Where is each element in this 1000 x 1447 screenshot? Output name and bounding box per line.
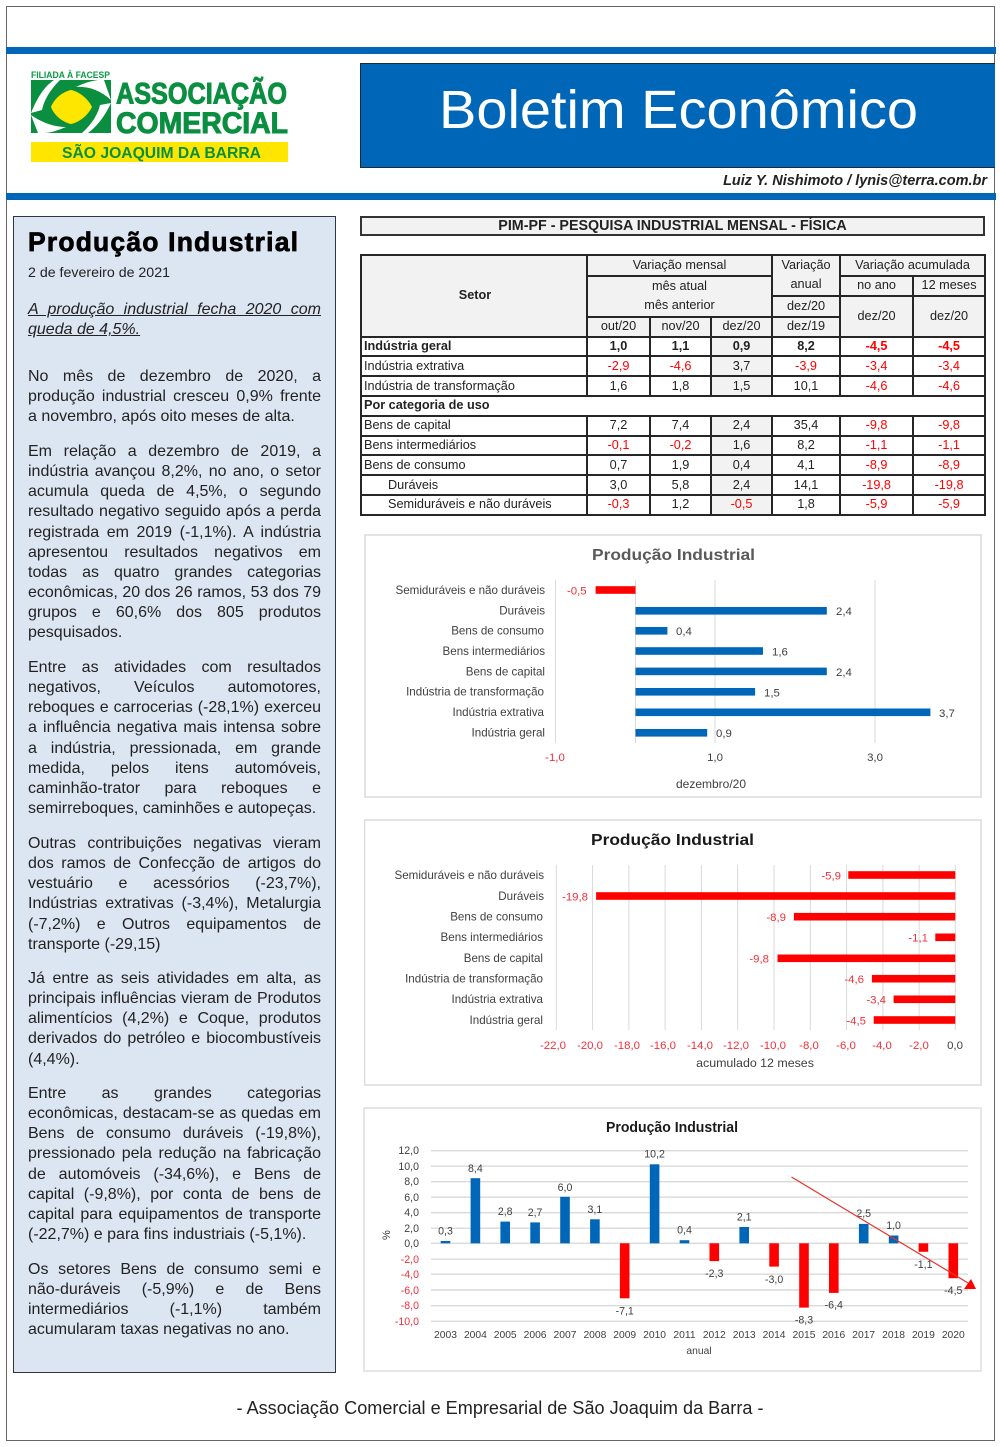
year labels: 2016 xyxy=(822,1330,846,1341)
paragraph 2: Em relação a dezembro de 2019, a xyxy=(28,443,321,460)
year labels: 2005 xyxy=(494,1330,517,1341)
category labels xyxy=(395,584,545,740)
author credit: Luiz Y. Nishimoto / lynis@terra.com.br xyxy=(723,173,987,189)
value labels: 2,7 xyxy=(528,1207,543,1219)
category labels: Bens intermediários xyxy=(443,645,545,658)
logo: Associação Comercial: SÃO JOAQUIM DA BARRA xyxy=(62,144,261,162)
value labels: 0,4 xyxy=(676,626,692,638)
axis labels xyxy=(545,752,883,791)
data table: -0,1 xyxy=(608,438,629,452)
paragraph 7: não-duráveis (-5,9%) e de Bens xyxy=(28,1281,321,1298)
category labels: Indústria geral xyxy=(470,1014,543,1027)
axis labels: 3,0 xyxy=(867,752,883,764)
value labels xyxy=(567,586,955,740)
paragraph 7: Os setores Bens de consumo semi e xyxy=(28,1261,321,1278)
data table: -0,2 xyxy=(670,438,691,452)
axis labels: -18,0 xyxy=(614,1040,640,1052)
data table: 2,4 xyxy=(733,478,750,492)
data table: 1,1 xyxy=(672,339,689,353)
logo: Associação Comercial: FILIADA À FACESP xyxy=(31,70,110,80)
data table: 1,9 xyxy=(672,458,689,472)
year labels: 2004 xyxy=(464,1330,487,1341)
paragraph 1: a novembro, após oito meses de alta. xyxy=(28,408,295,425)
axis labels: -6,0 xyxy=(836,1040,856,1052)
chart title: Produção Industrial xyxy=(591,832,754,849)
data table: dez/20 xyxy=(857,309,896,323)
data table: -1,1 xyxy=(938,438,960,452)
paragraph 7: intermediários (-1,1%) também xyxy=(28,1301,321,1318)
data table: 3,7 xyxy=(733,359,750,373)
article lead: A produção industrial fecha 2020 com xyxy=(28,301,321,318)
category labels: Indústria de transformação xyxy=(406,686,544,698)
category labels xyxy=(394,869,544,1027)
data table: -0,5 xyxy=(731,497,752,511)
y axis labels: -4,0 xyxy=(401,1269,419,1281)
data table: Duráveis xyxy=(388,478,438,492)
chart: anual column chart xyxy=(363,1107,982,1372)
data table: 1,0 xyxy=(610,339,627,353)
paragraph 4: dos ramos de Confecção de artigos do xyxy=(28,855,321,872)
category labels: Bens de consumo xyxy=(450,910,543,924)
year labels: 2020 xyxy=(942,1330,965,1341)
category labels: Indústria geral xyxy=(472,726,545,740)
paragraph 2 xyxy=(28,443,322,641)
data table: -19,8 xyxy=(935,478,964,492)
value labels: 0,3 xyxy=(438,1226,453,1238)
data table: Variação mensal xyxy=(633,258,726,272)
chart: acumulado 12 meses horizontal bars xyxy=(364,819,982,1086)
paragraph 6: capital (-9,8%), por conta de bens de xyxy=(28,1186,321,1203)
category labels: Semiduráveis e não duráveis xyxy=(395,584,545,597)
data table: mês anterior xyxy=(644,298,715,312)
paragraph 6: pressionado pela redução na fabricação xyxy=(28,1145,321,1162)
paragraph 4: Indústrias extrativas (-3,4%), Metalurgia xyxy=(28,895,321,912)
data table: -9,8 xyxy=(938,418,960,432)
paragraph 3: Entre as atividades com resultados xyxy=(28,659,321,676)
banner title text: Boletim Econômico xyxy=(439,80,918,140)
axis labels: -12,0 xyxy=(723,1040,749,1052)
paragraph 2: registrada em 2019 (-1,1%). A indústria xyxy=(28,524,321,541)
paragraph 5: alimentícios (4,2%) e Coque, produtos xyxy=(28,1010,321,1027)
data table: 1,6 xyxy=(610,379,627,393)
panel background xyxy=(13,216,336,1373)
data table: 0,7 xyxy=(610,458,627,472)
value labels: -3,0 xyxy=(765,1274,783,1286)
axis labels: -16,0 xyxy=(650,1040,676,1052)
paragraph 6: capital para equipamentos de transporte xyxy=(28,1206,321,1223)
axis labels xyxy=(540,1040,963,1052)
y axis labels: 6,0 xyxy=(404,1192,419,1204)
paragraph 4: vestuário e acessórios (-23,7%), xyxy=(28,875,321,892)
year labels: 2012 xyxy=(703,1330,726,1341)
paragraph 6: Entre as grandes categorias xyxy=(28,1085,321,1102)
data table: -3,4 xyxy=(866,359,887,373)
value labels: -4,5 xyxy=(846,1016,866,1028)
value labels: 2,1 xyxy=(737,1212,752,1224)
data table: -3,9 xyxy=(795,359,817,373)
data table: Bens de capital xyxy=(364,418,451,432)
paragraph 6: (-22,7%) e para fins industriais (-5,1%). xyxy=(28,1226,306,1243)
data table: Setor xyxy=(459,288,491,302)
paragraph 3: caminhão-trator para reboques e xyxy=(28,780,321,797)
value labels: -4,6 xyxy=(844,974,864,986)
y axis labels: -10,0 xyxy=(395,1316,419,1328)
paragraph 6: Bens de consumo duráveis (-19,8%), xyxy=(28,1125,321,1142)
data table: -5,9 xyxy=(866,497,887,511)
data table: 4,1 xyxy=(797,458,815,472)
paragraph 3: negativos, Veículos automotores, xyxy=(28,679,321,696)
y axis labels: 4,0 xyxy=(404,1207,419,1219)
value labels: 3,1 xyxy=(588,1204,602,1216)
value labels: -5,9 xyxy=(821,870,841,882)
value labels: -7,1 xyxy=(616,1306,634,1318)
data table: mês atual xyxy=(652,279,707,293)
title banner xyxy=(360,63,995,168)
paragraph 2: pesquisados. xyxy=(28,624,122,641)
axis labels: dezembro/20 xyxy=(676,777,746,791)
axis labels: -1,0 xyxy=(545,752,565,764)
arrow: downward trend xyxy=(792,1177,976,1289)
data table: -2,9 xyxy=(608,359,629,373)
data table: 10,1 xyxy=(794,379,818,393)
paragraph 3: a influência negativa mais intensa sobre xyxy=(28,719,321,736)
data table: Indústria de transformação xyxy=(364,379,515,393)
data table: 1,6 xyxy=(733,438,750,452)
data table: 1,5 xyxy=(733,379,750,393)
data table xyxy=(360,254,986,516)
paragraph 3: medida, pelos itens automóveis, xyxy=(28,760,321,777)
data table: -4,5 xyxy=(866,339,887,353)
logo: Associação Comercial xyxy=(31,70,288,162)
value labels: 2,8 xyxy=(498,1206,513,1218)
year labels: 2011 xyxy=(673,1330,696,1341)
year labels: 2019 xyxy=(912,1330,935,1341)
value labels: 1,6 xyxy=(772,646,788,658)
value labels: -3,4 xyxy=(866,994,886,1006)
y axis labels: -2,0 xyxy=(401,1254,419,1266)
paragraph 7 xyxy=(28,1261,321,1338)
data table: Variação acumulada xyxy=(855,258,970,272)
bars xyxy=(596,586,930,737)
data table: Variação xyxy=(781,258,831,272)
data table: 3,0 xyxy=(610,478,627,492)
data table: 8,2 xyxy=(797,438,815,452)
category labels: Indústria extrativa xyxy=(452,706,545,719)
data table: -3,4 xyxy=(938,359,960,373)
paragraph 7: acumularam taxas negativas no ano. xyxy=(28,1321,289,1338)
data table: 1,2 xyxy=(672,497,689,511)
year labels: 2014 xyxy=(763,1330,786,1341)
paragraph 1 xyxy=(28,368,322,425)
value labels: -1,1 xyxy=(914,1259,933,1271)
paragraph 3: semirreboques, caminhões e autopeças. xyxy=(28,800,316,817)
year labels xyxy=(434,1330,965,1357)
chart title: Produção Industrial xyxy=(592,547,755,564)
data table: Indústria extrativa xyxy=(364,359,464,373)
paragraph 2: acumula queda de 4,5%, o segundo xyxy=(28,483,321,500)
paragraph 5: derivados do petróleo e biocombustíveis xyxy=(28,1030,321,1047)
y axis title: % xyxy=(381,1230,393,1240)
data table: -4,6 xyxy=(670,359,691,373)
chart: dezembro/20 horizontal bars xyxy=(364,534,982,798)
axis labels: 1,0 xyxy=(707,752,723,764)
category labels: Semiduráveis e não duráveis xyxy=(394,869,544,882)
value labels: 1,5 xyxy=(764,688,780,700)
value labels: -6,4 xyxy=(825,1300,843,1312)
value labels: 1,0 xyxy=(886,1220,901,1232)
value labels: -4,5 xyxy=(944,1285,963,1297)
paragraph 2: apresentou resultados negativos em xyxy=(28,544,321,561)
paragraph 2: resultado negativo seguido após a perda xyxy=(28,503,321,520)
paragraph 1: No mês de dezembro de 2020, a xyxy=(28,368,321,385)
article heading: Produção Industrial xyxy=(28,227,298,257)
y axis labels xyxy=(395,1145,419,1328)
data table: 14,1 xyxy=(794,478,818,492)
category labels: Indústria de transformação xyxy=(405,972,543,986)
category labels: Bens intermediários xyxy=(441,931,543,944)
axis labels: 0,0 xyxy=(947,1040,963,1052)
paragraph 3: a indústria, pressionada, em grande xyxy=(28,740,321,757)
bars xyxy=(596,871,955,1024)
data table: Semiduráveis e não duráveis xyxy=(388,497,552,511)
paragraph 1: produção industrial cresceu 0,9% frente xyxy=(28,388,321,405)
y axis labels: -6,0 xyxy=(401,1285,419,1297)
bars xyxy=(441,1164,958,1308)
paragraph 5: Já entre as seis atividades em alta, as xyxy=(28,970,321,987)
value labels: 2,5 xyxy=(856,1208,871,1220)
value labels: 0,4 xyxy=(677,1224,692,1236)
paragraph 5: (4,4%). xyxy=(28,1051,80,1068)
value labels: -2,3 xyxy=(705,1268,724,1280)
article lead: queda de 4,5%. xyxy=(28,321,140,338)
value labels: 0,9 xyxy=(716,728,732,740)
data table: -4,6 xyxy=(938,379,960,393)
y axis labels: 0,0 xyxy=(404,1238,419,1250)
data table: 0,9 xyxy=(733,339,750,353)
footer: - Associação Comercial e Empresarial de São Joaquim da Barra - xyxy=(237,1398,763,1418)
data table: anual xyxy=(790,277,822,291)
data table: out/20 xyxy=(601,319,636,333)
table heading xyxy=(360,216,985,236)
value labels: -9,8 xyxy=(749,954,769,966)
article lead xyxy=(27,301,321,338)
data table: 5,8 xyxy=(672,478,689,492)
data table: dez/19 xyxy=(787,319,825,333)
category labels: Bens de capital xyxy=(466,666,545,678)
data table: 2,4 xyxy=(733,418,750,432)
year labels: 2007 xyxy=(554,1330,577,1341)
y axis labels: -8,0 xyxy=(401,1300,419,1312)
year labels: 2006 xyxy=(524,1330,547,1341)
paragraph 2: indústria avançou 8,2%, no ano, o setor xyxy=(28,463,321,480)
table heading: PIM-PF - PESQUISA INDUSTRIAL MENSAL - FÍSICA xyxy=(498,218,847,234)
data table: dez/20 xyxy=(930,309,968,323)
data table: -4,6 xyxy=(866,379,887,393)
logo: Associação Comercial: COMERCIAL xyxy=(116,107,288,140)
axis labels: -22,0 xyxy=(540,1040,566,1052)
data table: Por categoria de uso xyxy=(364,398,490,412)
category labels: Bens de consumo xyxy=(451,624,544,638)
year labels: 2017 xyxy=(852,1330,875,1341)
year labels: 2018 xyxy=(882,1330,905,1341)
paragraph 4: Outras contribuições negativas vieram xyxy=(28,835,321,852)
data table: Bens de consumo xyxy=(364,458,466,472)
value labels: 10,2 xyxy=(644,1148,665,1160)
paragraph 6: econômicas, destacam-se as quedas em xyxy=(28,1105,321,1122)
category labels: Duráveis xyxy=(499,604,545,618)
axis labels: -20,0 xyxy=(577,1040,603,1052)
axis labels: -2,0 xyxy=(909,1040,929,1052)
value labels xyxy=(438,1148,963,1326)
data table: -9,8 xyxy=(866,418,887,432)
y axis labels: 2,0 xyxy=(404,1223,419,1235)
data table: 8,2 xyxy=(797,339,815,353)
y axis labels: 10,0 xyxy=(398,1161,419,1173)
data table: -8,9 xyxy=(938,458,960,472)
axis labels: -14,0 xyxy=(687,1040,713,1052)
data table: 1,8 xyxy=(797,497,815,511)
category labels: Duráveis xyxy=(498,890,544,903)
value labels: 8,4 xyxy=(468,1163,483,1175)
data table: -5,9 xyxy=(938,497,960,511)
paragraph 2: econômicas, 20 dos 26 ramos, 53 dos 79 xyxy=(28,584,321,601)
value labels: 3,7 xyxy=(939,708,955,720)
value labels xyxy=(562,870,928,1028)
year labels: 2015 xyxy=(793,1330,816,1341)
axis title: acumulado 12 meses xyxy=(696,1056,814,1070)
data table: nov/20 xyxy=(661,319,700,333)
y axis labels: 8,0 xyxy=(404,1176,419,1188)
data table: dez/20 xyxy=(722,319,761,333)
paragraph 4 xyxy=(28,835,322,953)
paragraph 5 xyxy=(28,970,321,1068)
axis labels: -8,0 xyxy=(799,1040,819,1052)
year labels: 2009 xyxy=(613,1330,636,1341)
data table: 0,4 xyxy=(733,458,750,472)
year labels: 2010 xyxy=(643,1330,666,1341)
value labels: -8,3 xyxy=(795,1314,813,1326)
data table: -8,9 xyxy=(866,458,887,472)
data table: -1,1 xyxy=(866,438,887,452)
paragraph 3 xyxy=(28,659,321,817)
paragraph 2: grupos e 60,6% dos 805 produtos xyxy=(28,604,321,621)
article date: 2 de fevereiro de 2021 xyxy=(28,265,170,281)
paragraph 6: de automóveis (-34,6%), e Bens de xyxy=(28,1166,321,1183)
value labels: 2,4 xyxy=(836,606,852,618)
paragraph 3: reboques e carrocerias (-28,1%) exerceu xyxy=(28,699,321,716)
data table: Indústria geral xyxy=(364,339,451,353)
year labels: 2008 xyxy=(583,1330,607,1341)
value labels: -0,5 xyxy=(567,586,587,598)
data table: -4,5 xyxy=(938,339,960,353)
data table: 7,2 xyxy=(610,418,627,432)
data table: -19,8 xyxy=(862,478,891,492)
value labels: -8,9 xyxy=(766,912,786,924)
data table: -0,3 xyxy=(608,497,629,511)
lower blue rule xyxy=(6,193,996,200)
paragraph 4: transporte (-29,15) xyxy=(28,936,161,953)
category labels: Bens de capital xyxy=(464,952,543,965)
value labels: 2,4 xyxy=(836,667,852,679)
paragraph 2: todas as quatro grandes categorias xyxy=(28,564,321,581)
data table: 1,8 xyxy=(672,379,689,393)
y axis labels: 12,0 xyxy=(398,1145,419,1157)
year labels: 2003 xyxy=(434,1330,457,1341)
chart title: Produção Industrial xyxy=(606,1120,738,1136)
paragraph 6 xyxy=(28,1085,321,1243)
value labels: -19,8 xyxy=(562,892,588,904)
data table: 35,4 xyxy=(794,418,818,432)
data table: 12 meses xyxy=(922,278,977,292)
paragraph 4: (-7,2%) e Outros equipamentos de xyxy=(28,916,321,933)
axis labels: -10,0 xyxy=(760,1040,786,1052)
value labels: 6,0 xyxy=(558,1182,572,1194)
data table: 7,4 xyxy=(672,418,689,432)
year labels: 2013 xyxy=(733,1330,756,1341)
category labels: Indústria extrativa xyxy=(451,993,544,1006)
data table: dez/20 xyxy=(787,299,825,313)
year labels: anual xyxy=(686,1346,712,1357)
axis labels: -4,0 xyxy=(872,1040,892,1052)
paragraph 5: principais influências vieram de Produtos xyxy=(28,990,321,1007)
top blue rule xyxy=(6,47,996,54)
value labels: -1,1 xyxy=(908,932,928,944)
data table: no ano xyxy=(857,278,896,292)
data table: Bens intermediários xyxy=(364,438,476,452)
